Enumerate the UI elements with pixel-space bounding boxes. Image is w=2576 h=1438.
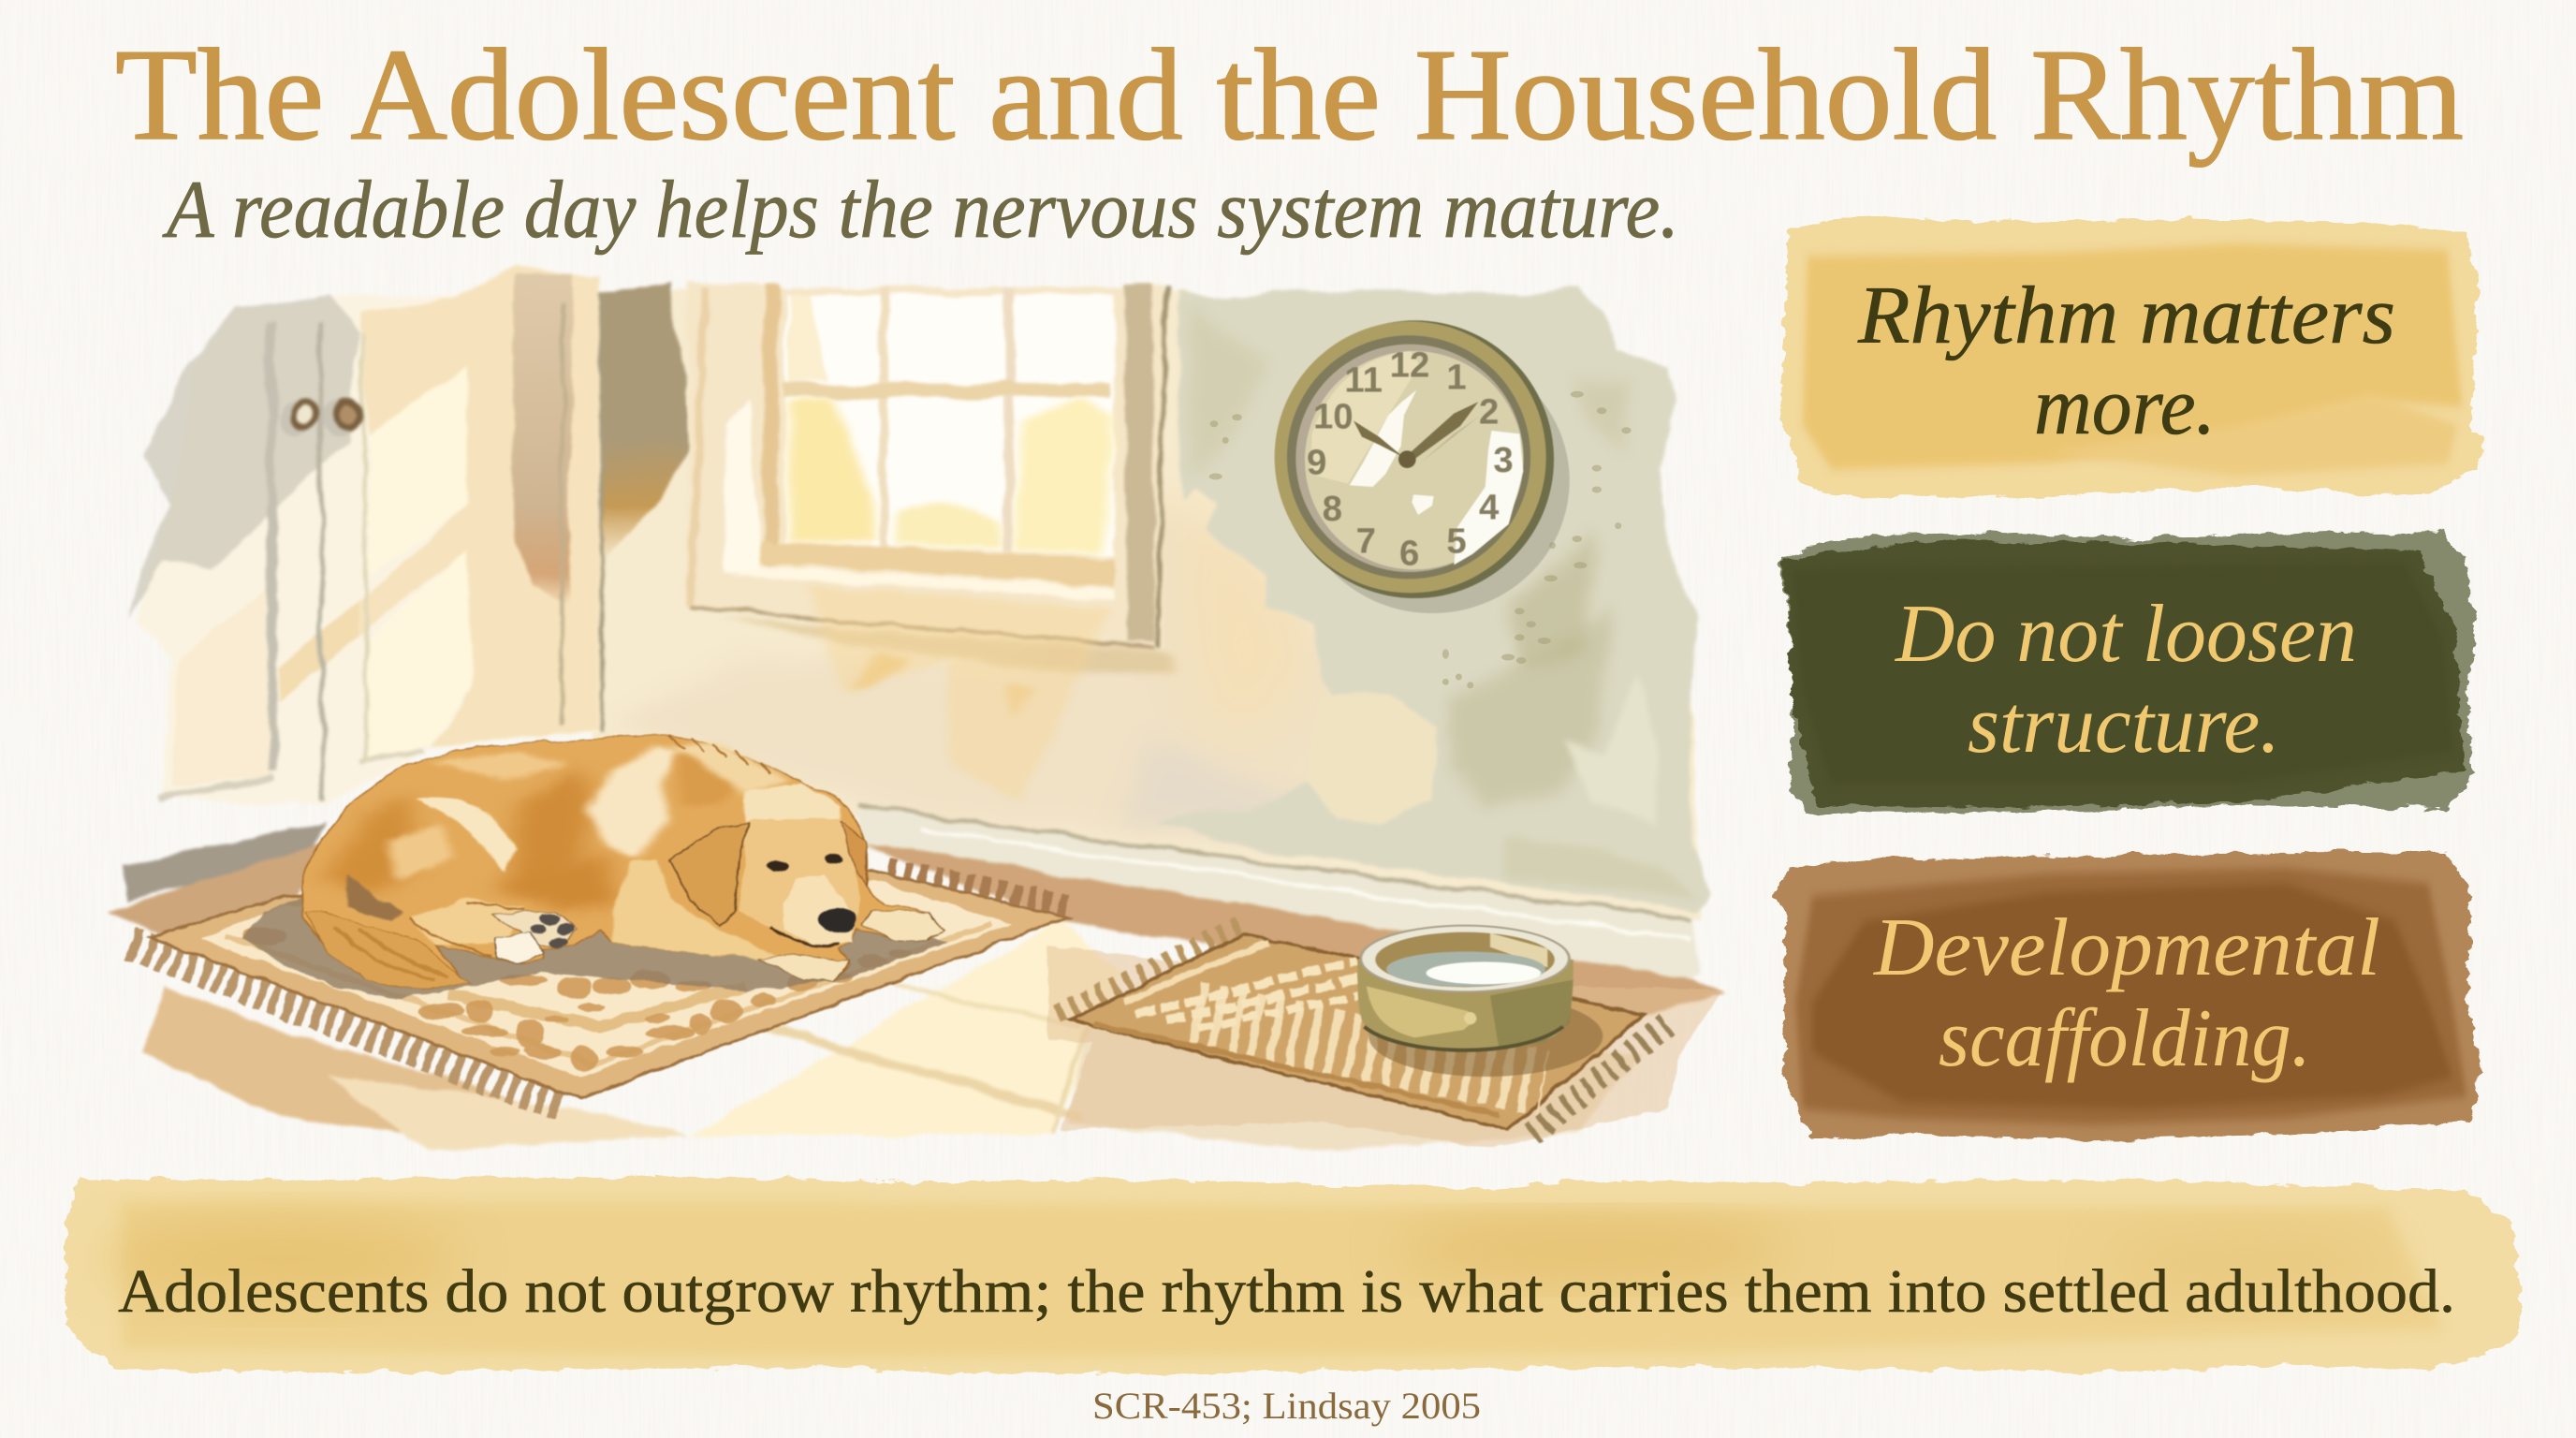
illustration: dog resting in a sunlit room (107, 268, 1725, 1150)
card: rhythm matters more: Rhythm matters (1857, 271, 2395, 361)
rug pattern (242, 927, 912, 1070)
card: do not loosen structure: Do not loosen (1895, 589, 2357, 680)
subtitle: A readable day helps the nervous system mature. (162, 165, 1679, 256)
light rays (808, 584, 1110, 800)
card: developmental scaffolding: scaffolding. (1939, 993, 2311, 1084)
dog body (302, 735, 944, 990)
clock numerals: 6 (1399, 534, 1419, 574)
clock numerals: 12 (1390, 345, 1429, 385)
dog eyes and nose (768, 855, 856, 945)
card: do not loosen structure (1778, 532, 2476, 814)
clock hands (1354, 402, 1479, 468)
baseboard (859, 805, 1700, 986)
dog fur strokes (410, 735, 770, 957)
patterned rug under the dog (131, 869, 1075, 1108)
clock numerals: 4 (1479, 487, 1500, 527)
bottom takeaway band (66, 1175, 2522, 1374)
clock numerals: 5 (1446, 521, 1467, 561)
woven mat with fringe (1048, 927, 1724, 1149)
bowl rim (1361, 926, 1569, 991)
clock numerals: 2 (1479, 391, 1499, 432)
clock numerals: 1 (1446, 358, 1467, 398)
dog shadow (242, 896, 947, 1000)
dog muzzle (783, 873, 854, 946)
wall mildew specks (1209, 391, 1632, 688)
dog tail (305, 911, 470, 990)
water bowl (1357, 926, 1603, 1077)
clock numerals: 9 (1307, 443, 1326, 483)
title: The Adolescent and the Household Rhythm (115, 22, 2464, 168)
clock numerals (1307, 345, 1514, 574)
window (688, 284, 1176, 800)
clock numerals: 7 (1356, 521, 1376, 561)
rug fringe (131, 869, 1075, 1108)
dog head (739, 817, 859, 946)
olive stained wall (1158, 285, 1712, 912)
bottom takeaway band: Adolescents do not outgrow rhythm; the rhythm is what carries them into settled adulthood. (118, 1257, 2455, 1326)
dog paws (492, 911, 944, 980)
bowl body (1357, 960, 1573, 1051)
clock numerals: 11 (1344, 360, 1383, 401)
clock numerals: 10 (1313, 397, 1354, 437)
bowl water (1386, 951, 1545, 987)
icon: cabinet knobs (279, 401, 359, 435)
source note: SCR-453; Lindsay 2005 (1092, 1385, 1481, 1427)
window frame wash (688, 284, 1165, 649)
card: developmental scaffolding: Developmental (1873, 902, 2380, 993)
clock numerals: 3 (1493, 440, 1514, 480)
golden retriever (302, 735, 944, 990)
card: do not loosen structure: structure. (1968, 680, 2280, 770)
mat fringe (1057, 927, 1667, 1137)
dog ear (669, 822, 748, 925)
card: rhythm matters more (1781, 215, 2483, 498)
cabinet doors on the left wall (128, 268, 692, 806)
floor (107, 822, 1725, 1150)
clock numerals: 8 (1323, 489, 1342, 529)
window panes (784, 294, 1114, 556)
card: rhythm matters more: more. (2034, 361, 2216, 452)
wall clock (1275, 320, 1570, 613)
wall wash (592, 289, 1700, 920)
card: developmental scaffolding (1774, 852, 2481, 1140)
dog fur shading (321, 742, 840, 961)
